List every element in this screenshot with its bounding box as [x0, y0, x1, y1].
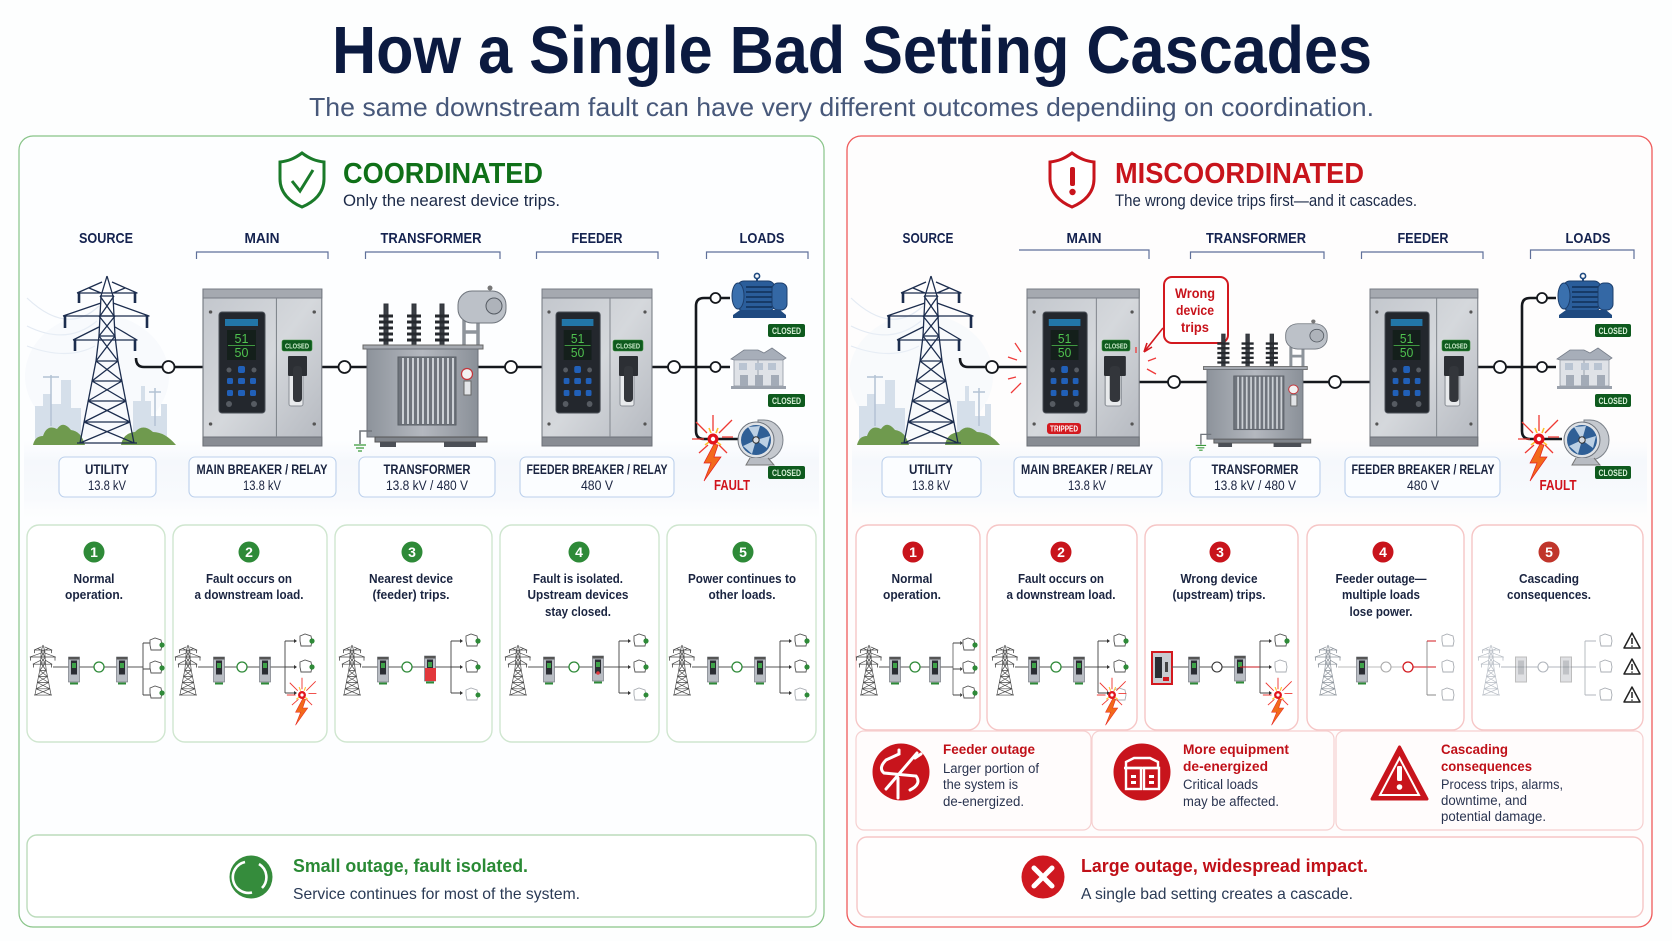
main breaker cabinet: tripped: [1027, 289, 1139, 446]
step 2: a downstream load.: [194, 588, 304, 602]
step 1: 1: [90, 544, 98, 560]
equipment labels: UTILITY: [909, 462, 953, 477]
column headers: LOADS: [1566, 230, 1610, 247]
feeder breaker cabinet: CLOSED: [616, 342, 640, 350]
step cards: coordinated: [27, 525, 816, 742]
step 1: operation.: [65, 588, 123, 602]
icon: fan load: [738, 420, 805, 479]
icon: green ring: [230, 856, 272, 898]
column headers: MAIN: [1066, 230, 1102, 247]
step 1: [30, 542, 165, 698]
card: cascading consequences: [1336, 731, 1643, 830]
card: more equipment: More equipment: [1183, 741, 1289, 757]
step 5: consequences.: [1507, 588, 1591, 602]
column headers: SOURCE: [902, 230, 954, 247]
step 5: 5: [1545, 544, 1553, 560]
fault label: FAULT: [1540, 478, 1577, 494]
equipment labels: FEEDER BREAKER / RELAY: [1352, 462, 1494, 477]
card: more equipment: [1092, 731, 1334, 830]
callout: wrong device trips: [1144, 277, 1228, 352]
icon: building load: [731, 348, 805, 407]
step 3: [1152, 542, 1292, 725]
card: more equipment: Critical loads: [1183, 777, 1258, 792]
icon: motor load: [732, 273, 805, 337]
panel: coordinated: [19, 136, 824, 927]
icon: green shield: [280, 153, 324, 207]
heading: coordinated: COORDINATED: [343, 158, 543, 190]
outcome: large outage: A single bad setting creates a cascade.: [1081, 886, 1353, 903]
main breaker cabinet: tripped: TRIPPED: [1050, 424, 1078, 434]
card: feeder outage: [856, 731, 1091, 830]
icon: utility tower: [849, 276, 1000, 445]
step 3: 3: [408, 544, 416, 560]
callout: wrong device trips: Wrong: [1175, 285, 1215, 301]
consequence cards: [856, 731, 1643, 830]
step 2: a downstream load.: [1006, 588, 1116, 602]
icon: building load: CLOSED: [1598, 396, 1628, 406]
icon: fan load: CLOSED: [772, 468, 801, 478]
step 2: 2: [245, 544, 253, 560]
equipment labels: [882, 457, 1500, 497]
card: cascading consequences: Process trips, alarms,: [1441, 777, 1563, 792]
step 5: Power continues to: [688, 572, 796, 586]
outcome: large outage: [857, 837, 1643, 917]
step 5: 5: [739, 544, 747, 560]
column headers: LOADS: [740, 230, 784, 247]
transformer: [1196, 319, 1327, 450]
step 4: Upstream devices: [528, 588, 629, 602]
equipment labels: MAIN BREAKER / RELAY: [1021, 462, 1153, 477]
step 1: 1: [909, 544, 917, 560]
equipment labels: TRANSFORMER: [1212, 462, 1299, 477]
card: feeder outage: Larger portion of: [943, 761, 1039, 776]
column headers: [902, 230, 1634, 259]
icon: fan load: [1564, 420, 1631, 479]
step 1: Normal: [74, 572, 114, 586]
subtitle: The same downstream fault can have very different outcomes dependiing on coordination.: [309, 92, 1374, 122]
step 2: [175, 542, 316, 725]
step 3: 3: [1216, 544, 1224, 560]
icon: motor load: CLOSED: [1598, 326, 1628, 336]
equipment labels: 13.8 kV / 480 V: [1214, 478, 1296, 493]
heading subtitle: Only the nearest device trips.: [343, 192, 560, 210]
step 4: stay closed.: [545, 605, 611, 619]
main breaker cabinet: tripped: CLOSED: [1104, 342, 1128, 350]
card: cascading consequences: Cascading: [1441, 741, 1508, 757]
step 4: 4: [1379, 544, 1387, 560]
step cards: miscoordinated: [856, 525, 1643, 730]
card: more equipment: de-energized: [1183, 758, 1268, 774]
card: feeder outage: the system is: [943, 777, 1018, 792]
icon: fault burst: [1518, 415, 1559, 481]
icon: building load: [1557, 348, 1631, 407]
equipment labels: TRANSFORMER: [384, 462, 471, 477]
equipment labels: MAIN BREAKER / RELAY: [196, 462, 328, 477]
callout: wrong device trips: trips: [1181, 319, 1209, 335]
step 2: Fault occurs on: [206, 572, 292, 586]
icon: fan load: CLOSED: [1598, 468, 1628, 478]
icon: red shield: [1050, 153, 1094, 207]
icon: fault burst: [692, 415, 733, 481]
feeder breaker cabinet: CLOSED: [1444, 342, 1468, 350]
card: cascading consequences: consequences: [1441, 758, 1532, 774]
main breaker cabinet: [203, 289, 322, 446]
title: How a Single Bad Setting Cascades: [332, 13, 1372, 88]
transformer: [354, 286, 506, 451]
equipment labels: 13.8 kV / 480 V: [386, 478, 468, 493]
trip sparks: [1008, 343, 1156, 393]
card: more equipment: may be affected.: [1183, 794, 1279, 809]
equipment labels: 13.8 kV: [912, 478, 950, 493]
panel: miscoordinated: [847, 136, 1652, 927]
step 1: [856, 542, 978, 698]
step 5: Cascading: [1519, 572, 1579, 586]
callout: wrong device trips: device: [1176, 302, 1214, 318]
step 1: operation.: [883, 588, 941, 602]
step 4: [505, 542, 649, 700]
icon: utility tower: [25, 276, 176, 445]
outcome: large outage: Large outage, widespread impact.: [1081, 856, 1368, 876]
step 3: (feeder) trips.: [372, 588, 450, 602]
step 3: (upstream) trips.: [1172, 588, 1266, 602]
heading: miscoordinated: MISCOORDINATED: [1115, 158, 1364, 190]
step 4: [1315, 542, 1454, 700]
one-line diagram: coordinated: [25, 273, 805, 494]
column headers: SOURCE: [79, 230, 133, 247]
step 3: Wrong device: [1180, 572, 1258, 586]
step 5: other loads.: [708, 588, 776, 602]
step 5: [669, 542, 810, 700]
icon: building load: CLOSED: [772, 396, 801, 406]
main breaker cabinet: CLOSED: [285, 342, 309, 350]
fault label: FAULT: [714, 478, 750, 494]
equipment labels: 480 V: [1407, 478, 1439, 493]
feeder breaker cabinet: [542, 289, 652, 446]
equipment labels: 480 V: [581, 478, 613, 493]
step 4: 4: [575, 544, 583, 560]
card: feeder outage: de-energized.: [943, 794, 1024, 809]
step 2: [992, 542, 1129, 725]
card: cascading consequences: downtime, and: [1441, 793, 1527, 808]
card: feeder outage: Feeder outage: [943, 741, 1035, 757]
step 1: Normal: [892, 572, 932, 586]
icon: motor load: CLOSED: [772, 326, 801, 336]
column headers: FEEDER: [1398, 230, 1449, 247]
one-line diagram: miscoordinated: [849, 273, 1631, 494]
equipment labels: 13.8 kV: [1068, 478, 1106, 493]
icon: motor load: [1558, 273, 1631, 337]
equipment labels: [59, 457, 674, 497]
icon: red x: [1022, 856, 1064, 898]
card: cascading consequences: potential damage.: [1441, 809, 1546, 824]
step 2: Fault occurs on: [1018, 572, 1104, 586]
step 4: Feeder outage—: [1336, 572, 1427, 586]
equipment labels: 13.8 kV: [88, 478, 126, 493]
column headers: TRANSFORMER: [1206, 230, 1306, 247]
column headers: [79, 230, 808, 259]
feeder breaker cabinet: [1370, 289, 1478, 446]
outcome: small outage: Small outage, fault isolated.: [293, 856, 528, 876]
equipment labels: 13.8 kV: [243, 478, 281, 493]
equipment labels: UTILITY: [85, 462, 129, 477]
step 3: Nearest device: [369, 572, 453, 586]
step 5: [1478, 542, 1640, 702]
outcome: small outage: Service continues for most of the system.: [293, 886, 580, 903]
outcome: small outage: [27, 835, 816, 917]
column headers: TRANSFORMER: [380, 230, 482, 247]
step 4: Fault is isolated.: [533, 572, 623, 586]
step 2: 2: [1057, 544, 1065, 560]
column headers: MAIN: [244, 230, 280, 247]
heading subtitle: The wrong device trips first—and it cascades.: [1115, 192, 1417, 210]
column headers: FEEDER: [572, 230, 623, 247]
step 4: lose power.: [1350, 605, 1412, 619]
step 4: multiple loads: [1342, 588, 1420, 602]
equipment labels: FEEDER BREAKER / RELAY: [526, 462, 668, 477]
step 3: [339, 542, 481, 700]
